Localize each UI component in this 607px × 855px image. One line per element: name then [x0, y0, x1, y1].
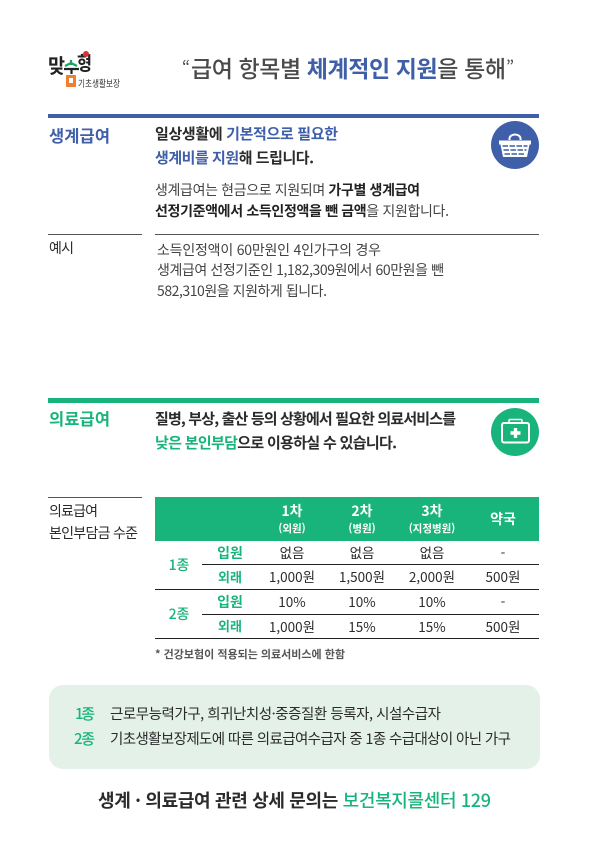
- table: 본인부담금: [155, 497, 539, 639]
- row labels: 입원: [217, 543, 243, 563]
- row labels: 외래: [218, 567, 242, 586]
- table header: (병원): [348, 521, 376, 536]
- lead text: 생계비를 지원해 드립니다.: [155, 147, 314, 168]
- table header: [278, 501, 516, 536]
- table values: 10%: [418, 591, 446, 611]
- icon: basket: [491, 121, 539, 169]
- table values: 500원: [486, 566, 520, 586]
- table values: 10%: [278, 591, 306, 611]
- table header: 1차: [281, 501, 303, 521]
- logo: [48, 49, 120, 90]
- footnote: * 건강보험이 적용되는 의료서비스에 한함: [155, 646, 345, 662]
- table values: 10%: [348, 591, 376, 611]
- table values: 1,000원: [269, 616, 315, 636]
- description text: [155, 180, 449, 221]
- label: 본인부담금 수준: 본인부담금 수준: [49, 523, 138, 543]
- lead text: [155, 123, 338, 168]
- description text: 선정기준액에서 소득인정액을 뺀 금액을 지원합니다.: [155, 201, 449, 221]
- contact line: 생계 · 의료급여 관련 상세 문의는 보건복지콜센터 129: [98, 787, 491, 813]
- row labels: [169, 543, 243, 635]
- heading: 생계급여: 생계급여: [49, 123, 110, 147]
- callout: 수급자 구분: 1종: [75, 703, 95, 724]
- table values: 1,500원: [339, 566, 385, 586]
- callout: 수급자 구분: [49, 685, 540, 769]
- heading: 의료급여: 의료급여: [49, 406, 110, 430]
- lead text: [155, 408, 456, 453]
- label: 예시: 예시: [49, 238, 74, 258]
- table values: 없음: [280, 542, 304, 562]
- description text: 생계급여는 현금으로 지원되며 가구별 생계급여: [155, 180, 420, 200]
- example text: [157, 240, 444, 301]
- example text: 생계급여 선정기준인 1,182,309원에서 60만원을 뺀: [157, 260, 444, 280]
- table values: -: [501, 542, 506, 562]
- row labels: 외래: [218, 616, 242, 635]
- table header: 3차: [421, 501, 443, 521]
- title: ”: [506, 53, 514, 78]
- example text: 582,310원을 지원하게 됩니다.: [157, 281, 327, 301]
- callout: 수급자 구분: 근로무능력가구, 희귀난치성·중증질환 등록자, 시설수급자: [110, 703, 441, 724]
- panel: 생계급여: [48, 114, 539, 301]
- table header: (지정병원): [409, 521, 455, 536]
- table header: (외원): [278, 521, 306, 536]
- table values: [269, 542, 520, 636]
- icon: first aid kit: [491, 408, 539, 456]
- lead text: 질병, 부상, 출산 등의 상황에서 필요한 의료서비스를: [155, 408, 456, 429]
- table values: 1,000원: [269, 566, 315, 586]
- callout: 수급자 구분: 2종: [74, 728, 95, 749]
- title: “: [182, 53, 190, 78]
- table values: 2,000원: [409, 566, 455, 586]
- label: 본인부담금 수준: [49, 501, 138, 543]
- logo: 형: [77, 49, 92, 76]
- logo: 기초생활보장: [78, 76, 120, 90]
- title: 급여 항목별 체계적인 지원을 통해: [191, 50, 506, 84]
- row labels: 입원: [217, 592, 243, 612]
- table values: 15%: [418, 616, 446, 636]
- table values: 500원: [486, 616, 520, 636]
- label: 본인부담금 수준: 의료급여: [49, 501, 98, 521]
- table values: 없음: [350, 542, 374, 562]
- example text: 소득인정액이 60만원인 4인가구의 경우: [157, 240, 381, 260]
- logo: 맞: [48, 50, 65, 79]
- lead text: 일상생활에 기본적으로 필요한: [155, 123, 338, 144]
- row labels: 1종: [169, 555, 190, 575]
- panel: 의료급여: [48, 398, 539, 662]
- table values: 없음: [420, 542, 444, 562]
- table values: 15%: [348, 616, 376, 636]
- table header: 약국: [490, 509, 516, 529]
- table header: 2차: [351, 501, 373, 521]
- table values: -: [501, 591, 506, 611]
- callout: 수급자 구분: 기초생활보장제도에 따른 의료급여수급자 중 1종 수급대상이 아닌 가구: [110, 728, 511, 749]
- row labels: 2종: [169, 604, 190, 624]
- lead text: 낮은 본인부담으로 이용하실 수 있습니다.: [155, 432, 397, 453]
